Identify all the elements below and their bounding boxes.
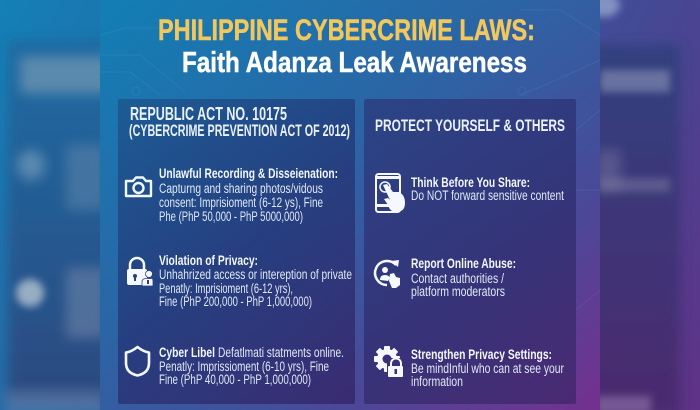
text: think before you share: Do NOT forward sensitive content xyxy=(411,188,564,203)
text: report online abuse: Report Online Abuse: xyxy=(411,255,516,271)
text: report online abuse xyxy=(411,255,516,299)
icon: phone with tapping hand xyxy=(376,174,405,212)
text: unlawful recording: Phe (PhP 50,000 - PhP 5000,000) xyxy=(159,209,303,224)
text: report online abuse: platform moderators xyxy=(411,284,505,299)
text: violation of privacy: Violation of Privacy: xyxy=(159,252,258,268)
text: strengthen privacy settings: Strengthen Privacy Settings: xyxy=(411,346,552,362)
icon: gear with padlock xyxy=(374,346,405,377)
icon: padlock with person xyxy=(127,258,153,286)
text: violation of privacy xyxy=(159,252,352,309)
title: PHILIPPINE CYBERCRIME LAWS: xyxy=(158,14,535,47)
text: think before you share xyxy=(411,174,564,203)
panel: Republic Act No. 10175 xyxy=(118,99,355,404)
text: cyber libel: Penatly: Imprissioment (6-10 yrs), Fine xyxy=(159,359,329,374)
icon: camera xyxy=(126,178,151,196)
text: report online abuse: Contact authorities / xyxy=(411,271,504,286)
text: violation of privacy: Penatly: Imprisioment (6-12 yrs), xyxy=(159,281,293,296)
panel heading: act name xyxy=(129,104,350,140)
text: strengthen privacy settings: Be mindInful who can at see your xyxy=(411,361,564,376)
icon: report abuse xyxy=(375,260,400,288)
title: Faith Adanza Leak Awareness xyxy=(182,47,527,79)
text: unlawful recording: Capturng and sharing photos/vidous xyxy=(159,181,323,196)
text: violation of privacy: Unhahrized access or intereption of private xyxy=(159,267,352,282)
panel heading: protect yourself: PROTECT YOURSELF & OTHERS xyxy=(375,117,565,135)
title xyxy=(158,14,535,79)
text: unlawful recording: Unlawful Recording & Disseienation: xyxy=(159,165,338,181)
panel: protect yourself and others xyxy=(364,99,576,404)
infographic background xyxy=(100,0,600,410)
panel heading: act name: REPUBLIC ACT NO. 10175 xyxy=(130,104,287,124)
text: cyber libel: Fine (PhP 40,000 - PhP 1,000,000) xyxy=(159,372,311,387)
text: unlawful recording: consent: Imprisioment (6-12 ys), Fine xyxy=(159,195,323,210)
text: cyber libel: Defatlmati statments online. xyxy=(218,345,344,360)
text: strengthen privacy settings xyxy=(411,346,564,389)
text: cyber libel xyxy=(159,344,344,387)
text: cyber libel: Cyber Libel xyxy=(159,344,215,360)
text: unlawful recording xyxy=(159,165,338,224)
text: strengthen privacy settings: information xyxy=(411,374,463,389)
icon: shield xyxy=(126,347,149,376)
text: think before you share: Think Before You Share: xyxy=(411,174,530,190)
text: violation of privacy: Fine (PhP 200,000 - PhP 1,000,000) xyxy=(159,294,312,309)
panel heading: act name: (CYBERCRIME PREVENTION ACT OF 2012) xyxy=(129,122,350,140)
